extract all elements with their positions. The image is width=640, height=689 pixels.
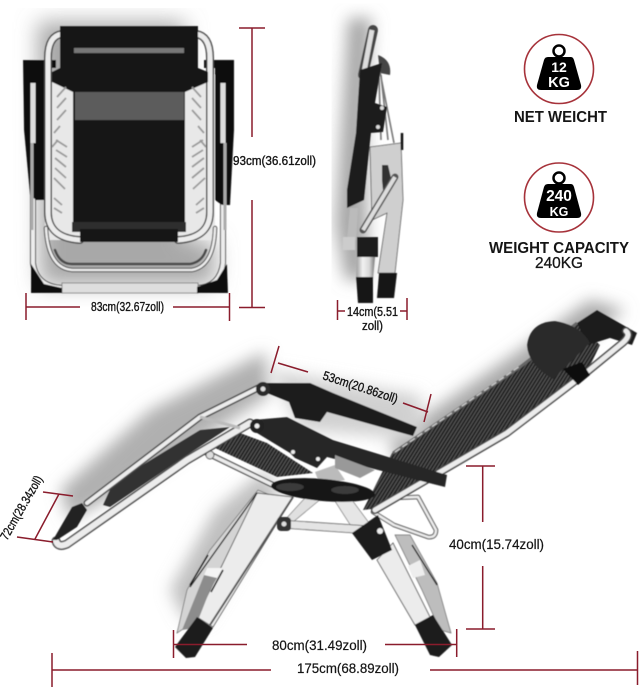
weight capacity label: 240KG — [535, 255, 583, 272]
dimension: leg span 80cm — [173, 629, 457, 658]
front armrest — [253, 417, 447, 487]
net weight badge — [524, 34, 594, 104]
weight capacity badge: 240 — [546, 188, 572, 205]
seat mesh — [213, 433, 313, 477]
right armrest — [204, 60, 234, 205]
dimension: width 83cm — [26, 293, 230, 321]
feet — [31, 264, 62, 293]
left leg — [177, 490, 275, 633]
weight capacity badge — [524, 163, 594, 232]
cup holder — [270, 475, 376, 505]
right leg — [377, 543, 430, 625]
dimension: folded width 14cm: 14cm(5.51 — [347, 305, 398, 319]
dimension: leg span 80cm: 80cm(31.49zoll) — [272, 638, 367, 653]
dimension: footrest width 72cm — [0, 473, 73, 542]
dimension: total length 175cm: 175cm(68.89zoll) — [297, 661, 399, 676]
footrest tubes — [87, 387, 260, 503]
crossbar — [280, 520, 370, 534]
rear loop — [373, 497, 436, 537]
rear armrest — [260, 383, 417, 436]
dimension: width 83cm: 83cm(32.67zoll) — [91, 300, 164, 314]
weight capacity label — [489, 240, 629, 272]
footrest pad — [53, 503, 87, 540]
seat tube — [207, 453, 277, 487]
middle legs — [283, 498, 322, 522]
weight capacity badge: KG — [550, 205, 568, 219]
reclined chair side view — [53, 300, 637, 658]
left armrest — [23, 60, 56, 200]
weight capacity label: WEIGHT CAPACITY — [489, 240, 629, 257]
dimension: height 93cm — [233, 28, 316, 308]
folded armrest — [347, 63, 387, 208]
hinge mechanism — [315, 465, 345, 485]
feet — [175, 617, 213, 658]
net weight label: NET WEICHT — [514, 109, 607, 126]
shadows — [60, 352, 270, 520]
dimension: armrest length 53cm: 53cm(20.86zoll) — [321, 369, 400, 406]
head pillow — [527, 321, 590, 379]
dimension: total length 175cm — [52, 651, 638, 687]
springs — [52, 87, 206, 213]
seat fabric — [52, 26, 208, 230]
dimension: folded width 14cm — [337, 298, 407, 333]
back frame tube — [48, 34, 210, 240]
net weight badge: 12 — [551, 59, 567, 75]
front view chair — [23, 22, 234, 293]
dimension: folded width 14cm: zoll) — [362, 319, 383, 333]
net weight badge: KG — [548, 75, 570, 91]
dimension: seat height 40cm — [449, 466, 544, 629]
dimension: armrest length 53cm — [271, 346, 431, 422]
bracket — [352, 515, 392, 560]
folded side view chair — [335, 18, 403, 303]
back tubes — [577, 310, 637, 345]
dimension: seat height 40cm: 40cm(15.74zoll) — [449, 537, 544, 552]
dimension: height 93cm: 93cm(36.61zoll) — [233, 154, 316, 168]
